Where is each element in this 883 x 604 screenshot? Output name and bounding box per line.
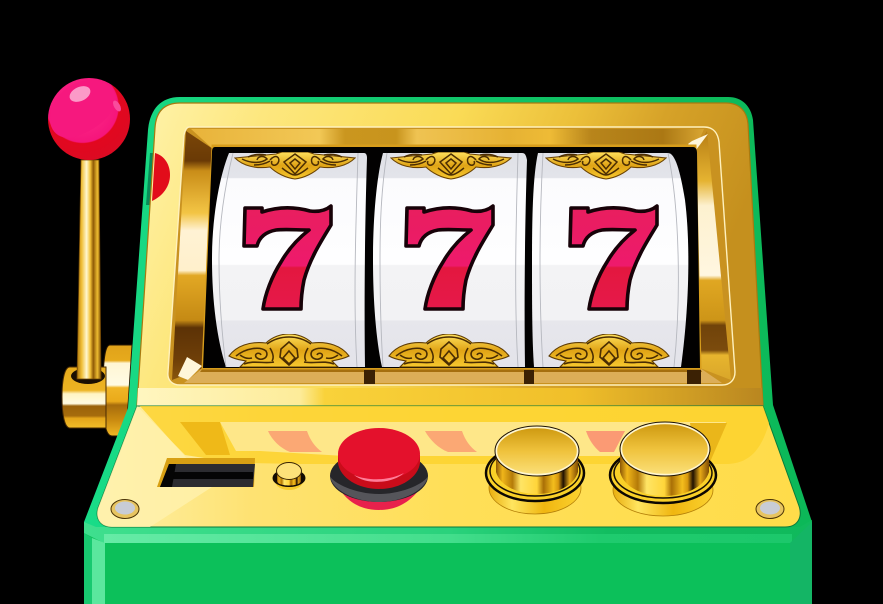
panel top band	[140, 406, 769, 464]
lever socket	[71, 368, 105, 384]
red button	[330, 428, 428, 510]
cap	[496, 427, 578, 475]
green shadow beside red bump	[146, 153, 155, 205]
red reflection on face	[152, 153, 170, 201]
left side	[84, 533, 92, 604]
window reflection	[220, 422, 726, 456]
reel 1	[212, 152, 367, 367]
left glow	[97, 406, 230, 527]
ornament top	[546, 152, 666, 179]
gold button right	[610, 422, 716, 516]
small button	[272, 462, 306, 490]
lower control panel	[97, 406, 800, 527]
frame outer	[168, 127, 735, 385]
upper gold face	[137, 103, 763, 406]
green front body	[84, 520, 812, 604]
window frame	[168, 127, 735, 385]
ornament bottom	[389, 334, 509, 367]
reel 2	[373, 152, 527, 367]
frame right bevel	[695, 131, 731, 380]
front panel	[84, 530, 812, 604]
frame bottom bevel	[184, 368, 722, 383]
rim	[84, 520, 812, 543]
button side	[338, 455, 420, 489]
cap	[621, 423, 709, 475]
inner gold strip	[203, 146, 700, 368]
gold button left	[486, 426, 584, 514]
corner highlights	[178, 357, 202, 380]
lever	[48, 78, 132, 436]
ornament top	[235, 152, 355, 179]
right side	[790, 522, 812, 604]
seven	[406, 206, 493, 309]
seven	[244, 206, 331, 309]
button cap	[338, 428, 420, 480]
coin slot	[157, 458, 255, 487]
cylinder	[496, 452, 578, 494]
cabinet shell	[84, 97, 812, 604]
ornament bottom	[549, 334, 669, 367]
reflection gaps in bottom bevel	[364, 370, 701, 384]
black ring	[330, 450, 428, 502]
button base	[613, 464, 713, 516]
screw left	[111, 500, 139, 518]
button base	[489, 462, 581, 514]
ring	[486, 445, 584, 501]
button base	[339, 486, 422, 510]
cylinder	[620, 450, 709, 496]
lever rear disc	[103, 345, 132, 436]
lever hub	[62, 367, 106, 428]
window black	[203, 147, 700, 368]
frame left bevel	[172, 131, 213, 380]
face lower band	[137, 388, 763, 406]
screw right	[756, 500, 784, 518]
ornament top	[391, 152, 511, 179]
lever rod	[77, 160, 101, 379]
salmon reflections	[268, 431, 322, 452]
seven	[570, 206, 657, 309]
lever knob	[48, 78, 130, 160]
ornament bottom	[229, 334, 349, 367]
reel 3	[532, 152, 688, 367]
frame top bevel	[191, 129, 704, 149]
ring	[610, 447, 716, 503]
